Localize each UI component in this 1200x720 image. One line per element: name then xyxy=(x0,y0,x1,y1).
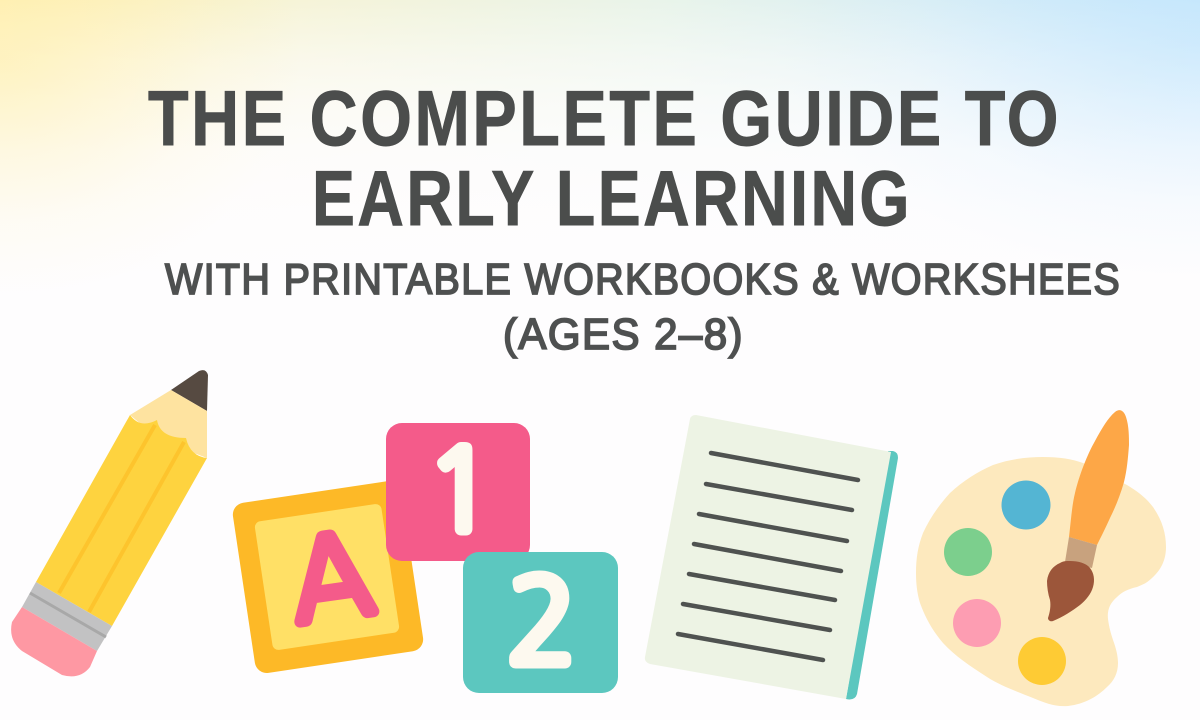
paint well green xyxy=(944,528,992,576)
icon: letter block A xyxy=(231,479,425,675)
title xyxy=(148,74,1061,242)
paint well pink xyxy=(953,599,1001,647)
brush bristles xyxy=(1047,561,1094,621)
title: EARLY LEARNING xyxy=(312,154,912,242)
paint well blue xyxy=(1002,480,1050,530)
brush ferrule xyxy=(1065,537,1097,568)
icon: number block 1: 1 xyxy=(426,435,494,547)
icon: worksheet xyxy=(645,415,898,699)
pencil body xyxy=(36,415,207,626)
worksheet teal edge xyxy=(846,451,898,699)
icon: number block 2 xyxy=(463,552,618,693)
icon: paint palette xyxy=(916,410,1166,706)
pencil wood xyxy=(130,390,207,458)
subtitle xyxy=(165,255,1121,359)
icon: letter block A: A xyxy=(283,518,379,640)
icon: number block 1 xyxy=(386,423,530,561)
subtitle: (AGES 2–8) xyxy=(503,310,744,359)
icon: number block 2: 2 xyxy=(507,564,577,680)
pencil ferrule xyxy=(22,582,112,651)
worksheet page xyxy=(645,415,891,699)
palette board xyxy=(916,457,1166,706)
paint well yellow xyxy=(1018,637,1066,685)
icon: pencil xyxy=(11,370,208,676)
pencil tip xyxy=(171,370,208,411)
brush handle xyxy=(1069,410,1129,545)
worksheet text lines xyxy=(678,453,858,660)
pencil eraser xyxy=(11,607,97,676)
title: THE COMPLETE GUIDE TO xyxy=(148,74,1061,162)
pencil stripes xyxy=(59,425,184,612)
subtitle: WITH PRINTABLE WORKBOOKS & WORKSHEES xyxy=(165,255,1121,304)
